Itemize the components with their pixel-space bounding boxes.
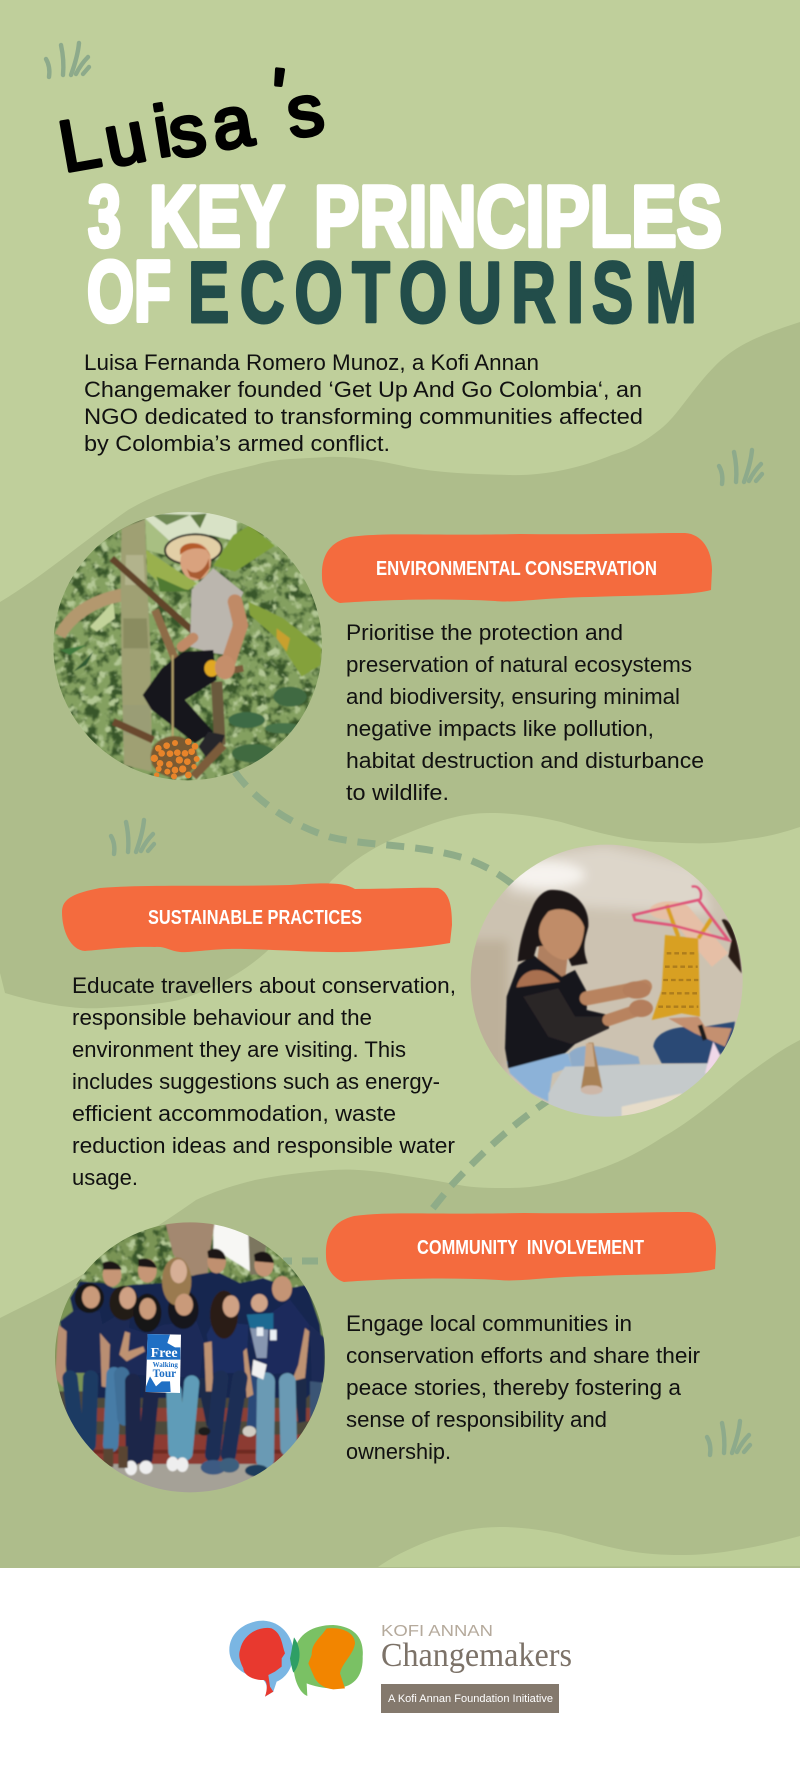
intro paragraph: by Colombia’s armed conflict. xyxy=(84,431,390,456)
body text: environmental conservation: preservation of natural ecosystems xyxy=(346,652,692,677)
branches xyxy=(112,558,193,632)
logo tagline box xyxy=(381,1684,559,1713)
title: 3 key principles of ecotourism: 3 xyxy=(88,169,121,265)
badge: community involvement xyxy=(326,1212,716,1282)
intro paragraph xyxy=(84,350,643,456)
body text: environmental conservation: Prioritise the protection and xyxy=(346,620,623,645)
badge: sustainable practices xyxy=(62,883,452,952)
right person's legs xyxy=(653,1022,735,1063)
logo text: Kofi Annan: KOFI ANNAN xyxy=(381,1623,493,1640)
badge: sustainable practices: SUSTAINABLE PRACTICES xyxy=(148,906,362,929)
banana leaves xyxy=(90,602,115,632)
crochet holes xyxy=(658,953,698,1007)
body text: community involvement: peace stories, thereby fostering a xyxy=(346,1375,682,1400)
right person's arm and hand xyxy=(682,915,720,960)
forearms and hands xyxy=(587,987,645,998)
body text: environmental conservation: habitat destruction and disturbance xyxy=(346,748,704,773)
sign: Free Walking Tour: Free xyxy=(151,1346,178,1361)
body text: sustainable practices: Educate travellers about conservation, xyxy=(72,973,456,998)
front row bodies xyxy=(60,1310,88,1374)
faces xyxy=(82,1286,100,1308)
body text: community involvement xyxy=(346,1311,700,1464)
body text: sustainable practices: responsible behaviour and the xyxy=(72,1005,372,1030)
background: upper dark wave xyxy=(0,322,800,1008)
floor, softly blurred xyxy=(470,844,742,1104)
lower right dark leaves xyxy=(228,712,265,728)
body text: environmental conservation: negative impacts like pollution, xyxy=(346,716,654,741)
intro paragraph: NGO dedicated to transforming communities affected xyxy=(84,404,643,429)
body text: sustainable practices xyxy=(72,973,456,1190)
photo: team group with Free Walking Tour sign xyxy=(50,1218,330,1501)
sign: Free Walking Tour: Walking xyxy=(153,1361,178,1369)
logo text: Changemakers: Changemakers xyxy=(381,1637,572,1674)
body text: sustainable practices: reduction ideas and responsible water xyxy=(72,1133,455,1158)
ID badges and skin on neck xyxy=(270,1330,277,1340)
neck xyxy=(537,940,568,980)
table xyxy=(548,1063,708,1118)
icon: grass middle left xyxy=(111,820,154,854)
icon: speech bubble heads xyxy=(229,1621,363,1697)
foliage mottling xyxy=(50,505,330,785)
steps and ground xyxy=(60,1390,314,1436)
body text: sustainable practices: includes suggestions such as energy- xyxy=(72,1069,440,1094)
photo: woman crocheting xyxy=(470,844,742,1117)
hair xyxy=(75,1283,104,1313)
background: bottom light wave xyxy=(378,1527,800,1567)
title: 3 key principles of ecotourism xyxy=(87,169,722,340)
dress xyxy=(652,935,700,1020)
badge: environmental conservation xyxy=(322,533,712,603)
title: 3 key principles of ecotourism: OF xyxy=(87,244,171,340)
body text: community involvement: Engage local communities in xyxy=(346,1311,632,1336)
top and sleeve xyxy=(505,955,609,1068)
dashed connector: photo 3 to badge 3 xyxy=(283,1258,325,1264)
body text: community involvement: conservation efforts and share their xyxy=(346,1343,700,1368)
background: lower dark wave xyxy=(0,1040,800,1568)
body text: sustainable practices: usage. xyxy=(72,1165,138,1190)
right person's hair xyxy=(722,919,742,973)
trunk xyxy=(121,519,152,772)
title: 3 key principles of ecotourism: KEY xyxy=(149,169,285,265)
intro paragraph: Luisa Fernanda Romero Munoz, a Kofi Annan xyxy=(84,350,539,375)
footer: white band xyxy=(0,1568,800,1765)
hat and man xyxy=(164,533,222,566)
body text: environmental conservation: to wildlife. xyxy=(346,780,449,805)
body text: sustainable practices: efficient accommodation, waste xyxy=(72,1101,396,1126)
fruit bunch xyxy=(151,736,197,777)
face xyxy=(539,909,584,960)
spool xyxy=(581,1043,602,1093)
icon: grass upper right xyxy=(719,450,762,484)
icon: grass top left xyxy=(46,43,89,77)
dashed connector: photo 2 to badge 3 xyxy=(425,1098,552,1218)
body text: environmental conservation: and biodiversity, ensuring minimal xyxy=(346,684,680,709)
dashed connector: photo 1 to photo 2 xyxy=(235,772,515,886)
back row navy shirts xyxy=(70,1271,325,1398)
icon: grass lower right xyxy=(707,1421,750,1455)
upper sky xyxy=(145,512,237,542)
logo tagline box: A Kofi Annan Foundation Initiative xyxy=(388,1693,553,1705)
logo: Kofi Annan Changemakers xyxy=(229,1621,572,1713)
body text: community involvement: sense of responsibility and xyxy=(346,1407,607,1432)
hair xyxy=(518,890,588,966)
sign: Free Walking Tour: Tour xyxy=(153,1368,176,1380)
photo: man climbing palm tree xyxy=(50,505,330,785)
body text: sustainable practices: environment they are visiting. This xyxy=(72,1037,406,1062)
shoes xyxy=(125,1461,137,1475)
jeans and legs xyxy=(70,1375,289,1460)
title: 3 key principles of ecotourism: ECOTOURISM xyxy=(188,244,697,340)
intro paragraph: Changemaker founded ‘Get Up And Go Colombia‘, an xyxy=(84,377,642,402)
badge: environmental conservation: ENVIRONMENTAL CONSERVATION xyxy=(376,557,657,580)
woman's jeans xyxy=(569,1046,640,1067)
sign: Free Walking Tour xyxy=(146,1334,181,1393)
hanger xyxy=(633,900,728,940)
title: Luisa's handwritten: Luisa's xyxy=(53,54,329,188)
body text: community involvement: ownership. xyxy=(346,1439,451,1464)
sky and trunks xyxy=(213,1223,250,1271)
baby xyxy=(247,1313,273,1330)
body text: environmental conservation xyxy=(346,620,704,805)
badge: community involvement: COMMUNITY INVOLVEMENT xyxy=(417,1236,644,1259)
